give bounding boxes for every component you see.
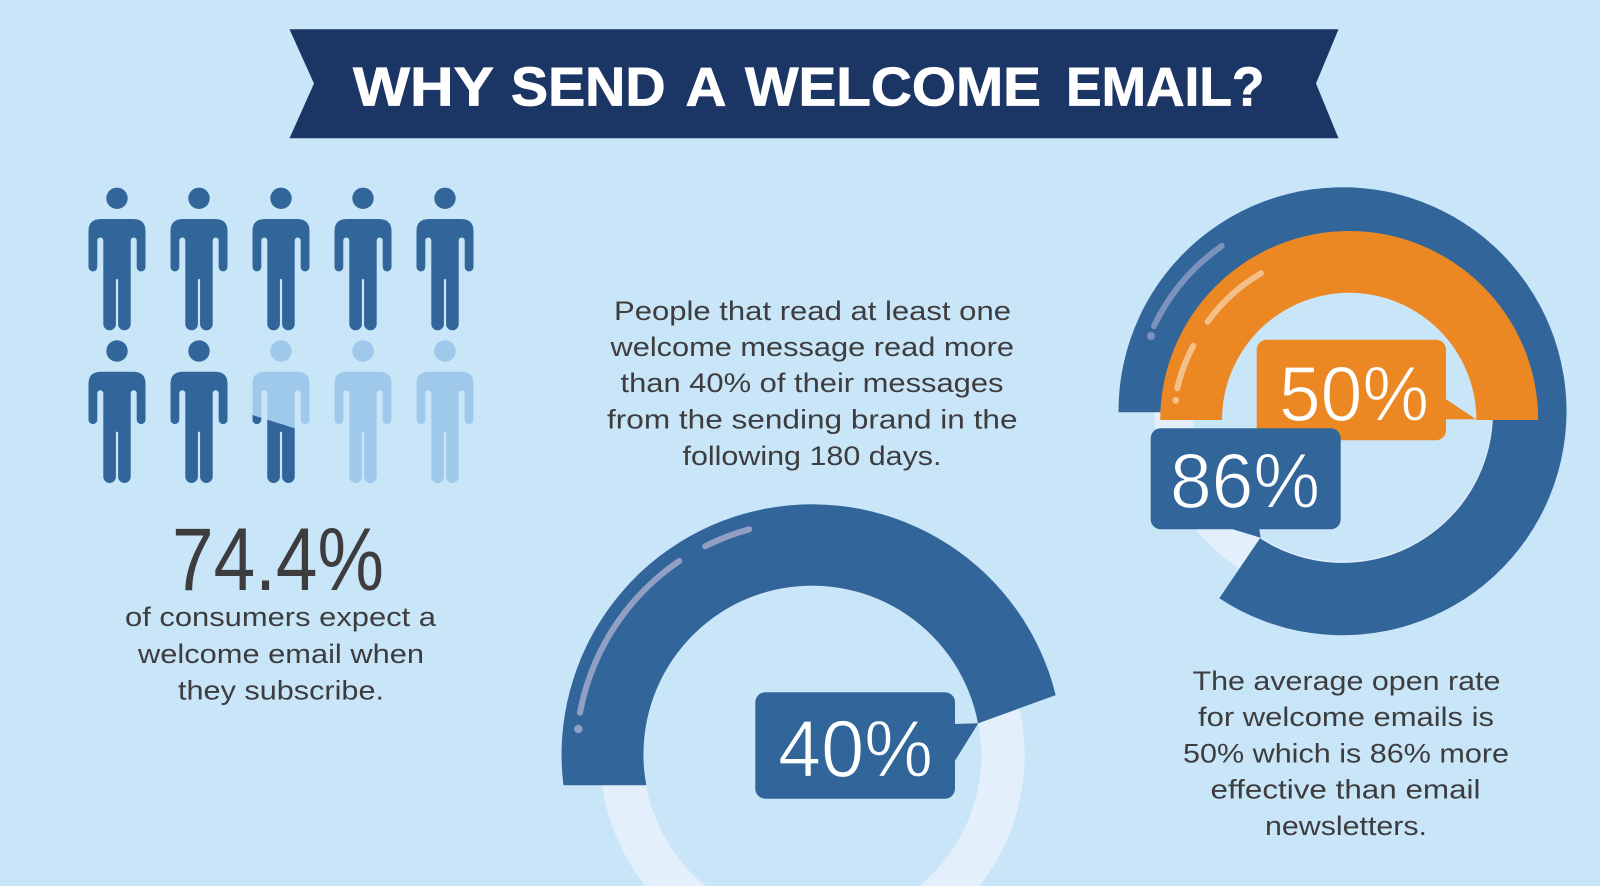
title: WELCOME	[745, 56, 1041, 118]
person 2	[170, 188, 228, 330]
middle caption: from the sending brand in the	[607, 405, 1018, 435]
person 5	[416, 188, 474, 330]
right caption: for welcome emails is	[1198, 702, 1494, 732]
donut chart: 86% and 50%	[1118, 187, 1566, 635]
middle caption: People that read at least one	[614, 296, 1011, 326]
right caption: 50% which is 86% more	[1183, 739, 1509, 769]
person 9	[334, 340, 392, 483]
left caption: welcome email when	[137, 639, 424, 669]
middle caption: than 40% of their messages	[620, 368, 1004, 398]
86% arc	[1118, 187, 1566, 635]
callout 50%	[1257, 340, 1476, 440]
blue gloss highlights	[1147, 246, 1222, 340]
right caption: effective than email	[1210, 775, 1480, 805]
middle caption	[607, 296, 1018, 471]
track ring	[1174, 242, 1512, 580]
left caption: they subscribe.	[178, 676, 384, 706]
callout 86%: 86%	[1170, 436, 1320, 524]
title: WHY	[353, 56, 494, 118]
title	[353, 56, 1264, 118]
callout 40%: 40%	[778, 705, 933, 795]
person 3	[252, 188, 310, 330]
person 10	[416, 340, 474, 483]
callout 50%: 50%	[1279, 350, 1429, 438]
right caption: The average open rate	[1192, 666, 1500, 696]
track ring	[600, 543, 1025, 886]
callout 86%	[1151, 428, 1341, 538]
title: EMAIL?	[1066, 56, 1264, 118]
person 6	[88, 340, 146, 483]
left caption: of consumers expect a	[125, 602, 437, 632]
gloss highlights	[574, 529, 749, 733]
right caption: newsletters.	[1265, 811, 1427, 841]
value arc	[562, 504, 1056, 785]
banner ribbon	[290, 29, 1338, 138]
person 1	[88, 188, 146, 330]
statistic 74.4%: 74.4%	[172, 509, 384, 609]
donut chart: 40%	[562, 504, 1056, 886]
title banner	[290, 29, 1338, 138]
title: A	[686, 56, 726, 118]
middle caption: following 180 days.	[682, 441, 942, 471]
50% arc	[1160, 231, 1538, 420]
right caption	[1183, 666, 1509, 841]
orange gloss highlights	[1172, 273, 1261, 404]
person 8 partially filled	[252, 340, 310, 483]
person 4	[334, 188, 392, 330]
middle caption: welcome message read more	[609, 332, 1014, 362]
title: SEND	[511, 56, 666, 118]
left caption	[125, 602, 437, 706]
callout 40%	[755, 692, 978, 799]
people pictogram: 74.4% of ten	[88, 188, 474, 483]
person 7	[170, 340, 228, 483]
